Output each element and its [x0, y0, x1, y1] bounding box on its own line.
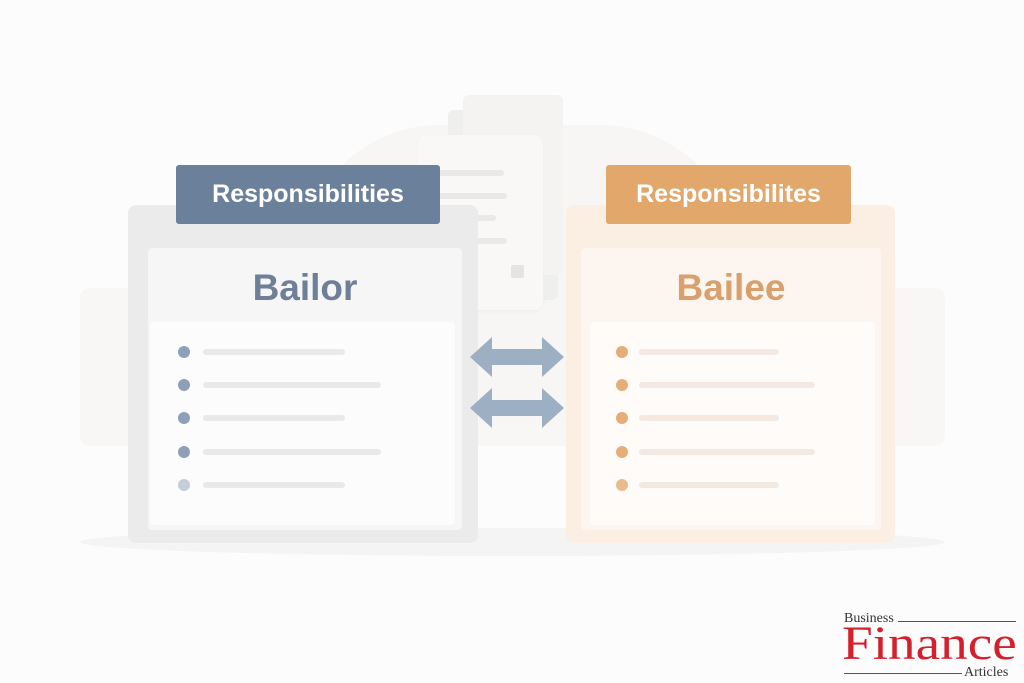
heading: Bailee: Bailee: [676, 267, 786, 308]
label: bailor responsibilities: [176, 165, 440, 224]
logo: Finance: [842, 617, 1017, 670]
floor shadow: [80, 528, 945, 556]
panel: bailor: [128, 205, 478, 543]
list: [150, 322, 455, 525]
label: bailee responsibilities: [606, 165, 851, 224]
bailee title card: [581, 248, 881, 530]
background band: [80, 288, 945, 446]
documents icon: [440, 95, 563, 300]
label: bailor responsibilities: Responsibilities: [212, 180, 404, 208]
logo: Articles: [964, 665, 1008, 680]
panel: bailee: [566, 205, 895, 543]
label: bailee responsibilities: Responsibilites: [636, 180, 821, 208]
bailor title card: [148, 248, 462, 530]
arrows: [470, 337, 564, 428]
background blob: [300, 125, 740, 425]
list: [590, 322, 875, 525]
logo: Business: [844, 611, 894, 626]
heading: Bailor: Bailor: [253, 267, 357, 308]
